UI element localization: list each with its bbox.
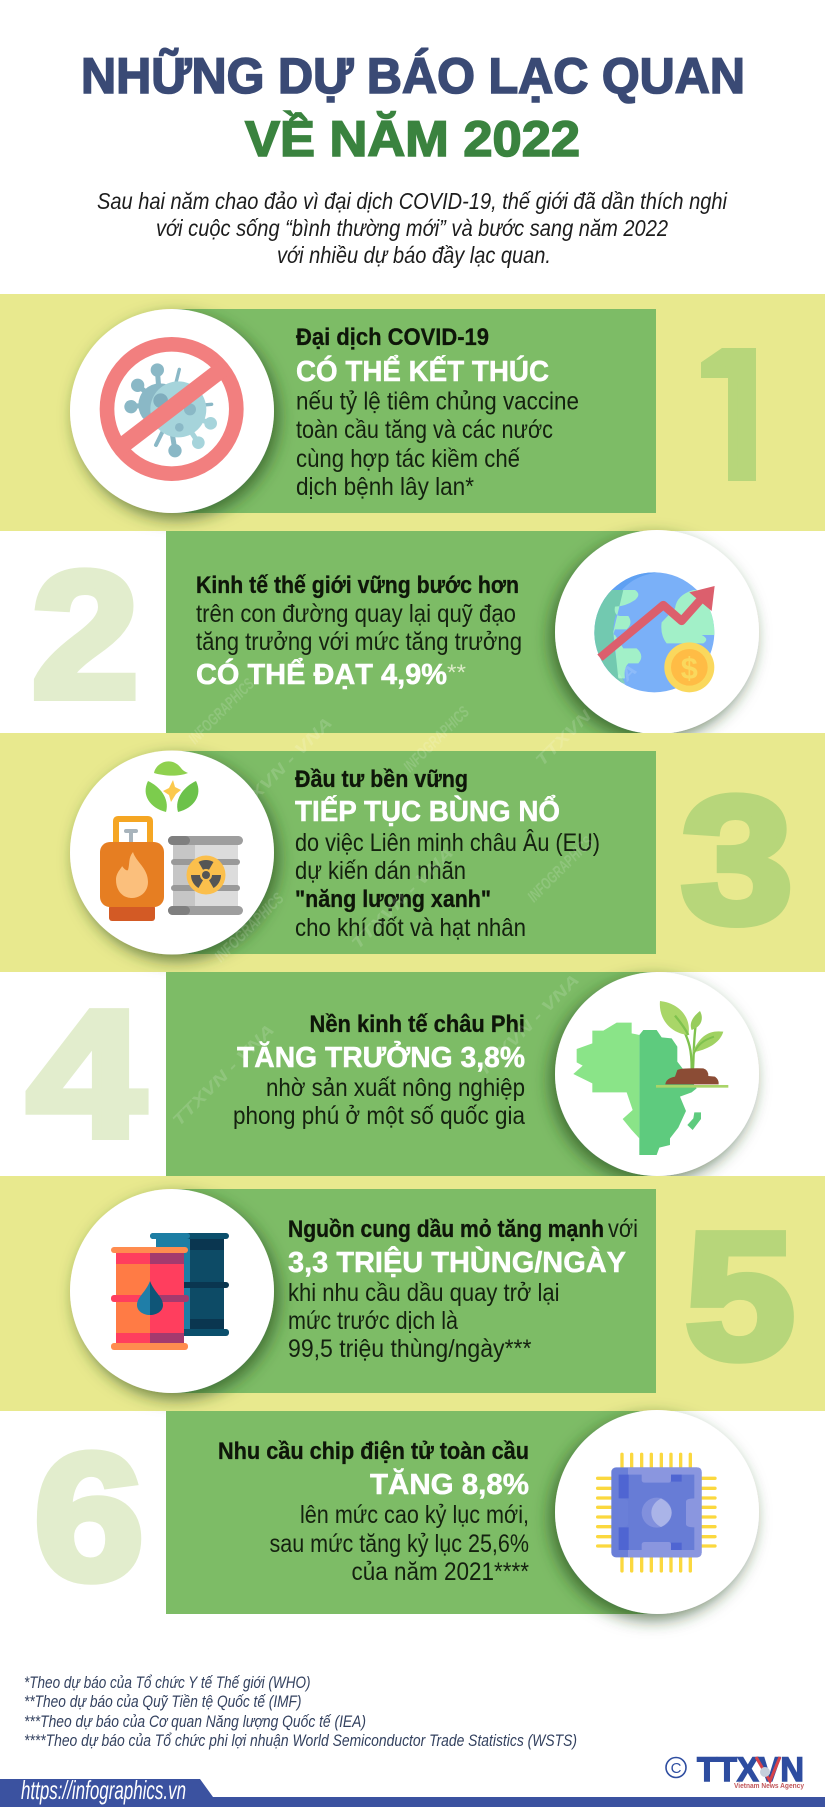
text block 4: Nền kinh tế châu Phi — [310, 1011, 525, 1038]
text block 5: mức trước dịch là — [288, 1307, 458, 1335]
text block 3: Đầu tư bền vững — [295, 766, 468, 793]
text block 2 — [196, 572, 522, 691]
intro text: với cuộc sống “bình thường mới” và bước sang năm 2022 — [156, 215, 668, 241]
watermarks: INFOGRAPHICS — [401, 704, 473, 776]
footer bar with URL: https://infographics.vn — [21, 1775, 186, 1805]
watermarks — [170, 662, 641, 1130]
icon: oil barrels — [111, 1233, 229, 1350]
title: VỀ NĂM 2022 — [245, 111, 580, 167]
logo: TTXVN: TTXVN — [697, 1751, 804, 1789]
text block 6: sau mức tăng kỷ lục 25,6% — [270, 1530, 529, 1558]
text block 2: Kinh tế thế giới vững bước hơn — [196, 572, 519, 599]
title — [81, 47, 745, 167]
icon: nuclear barrel — [168, 836, 243, 915]
icon circle 5 — [70, 1189, 274, 1393]
number 6: 6 — [34, 1417, 144, 1618]
text block 5: với — [608, 1215, 638, 1243]
icon: Africa map with plant — [573, 1001, 728, 1155]
text block 2: CÓ THỂ ĐẠT 4,9% — [196, 657, 447, 691]
title: NHỮNG DỰ BÁO LẠC QUAN — [81, 47, 745, 104]
icon circle 6 — [555, 1410, 759, 1614]
watermarks: INFOGRAPHICS — [212, 890, 288, 966]
watermarks: TTXVN - VNA — [170, 1022, 278, 1130]
text block 6: Nhu cầu chip điện tử toàn cầu — [218, 1438, 529, 1465]
panel: forecast 6 — [34, 1410, 759, 1618]
intro text: với nhiều dự báo đầy lạc quan. — [277, 242, 551, 268]
footnotes: ***Theo dự báo của Cơ quan Năng lượng Quốc tế (IEA) — [24, 1713, 366, 1731]
watermarks: INFOGRAPHICS — [525, 834, 597, 906]
icon: gas cylinder — [100, 819, 164, 921]
text block 5: Nguồn cung dầu mỏ tăng mạnh — [288, 1216, 604, 1243]
text block 1 — [296, 324, 579, 501]
icon: globe with rising arrow and coin: $ — [681, 651, 698, 685]
watermarks: INFOGRAPHICS — [186, 676, 258, 748]
icon: green energy leaves — [146, 761, 198, 812]
watermarks: TTXVN - VNA — [228, 715, 336, 823]
text block 1: nếu tỷ lệ tiêm chủng vaccine — [296, 388, 579, 416]
text block 1: CÓ THỂ KẾT THÚC — [296, 354, 549, 388]
panel: forecast 1 — [0, 294, 825, 531]
footnotes: *Theo dự báo của Tổ chức Y tế Thế giới (WHO) — [24, 1674, 310, 1692]
footnotes: ****Theo dự báo của Tổ chức phi lợi nhuận World Semiconductor Trade Statistics (WSTS) — [24, 1732, 577, 1750]
icon: microchip — [596, 1453, 717, 1573]
text block 4: phong phú ở một số quốc gia — [233, 1102, 525, 1130]
number 1: 1 — [689, 309, 789, 521]
icon circle 4 — [555, 972, 759, 1176]
icon circle 3 — [70, 750, 274, 954]
text block 6 — [218, 1438, 529, 1586]
text block 3: dự kiến dán nhãn — [295, 857, 466, 885]
text block 4 — [233, 1011, 525, 1130]
panel: forecast 5 — [0, 1176, 825, 1411]
text block 5: 99,5 triệu thùng/ngày*** — [288, 1335, 532, 1363]
watermarks: TTXVN - VNA — [349, 845, 457, 953]
text block 6: lên mức cao kỷ lục mới, — [300, 1501, 529, 1529]
logo: TTXVN: Vietnam News Agency — [734, 1781, 805, 1790]
icon circle 2 — [555, 530, 759, 734]
number 5: 5 — [685, 1196, 795, 1397]
intro text: Sau hai năm chao đảo vì đại dịch COVID-19, thế giới đã dần thích nghi — [97, 188, 728, 214]
icon circle 1 — [70, 309, 274, 513]
text block 4: nhờ sản xuất nông nghiệp — [266, 1074, 525, 1102]
text block 5 — [288, 1215, 638, 1363]
text block 3: TIẾP TỤC BÙNG NỔ — [295, 794, 560, 828]
text block 1: Đại dịch COVID-19 — [296, 324, 489, 351]
watermarks: TTXVN - VNA — [475, 972, 583, 1080]
text block 3: do việc Liên minh châu Âu (EU) — [295, 828, 600, 857]
text block 6: của năm 2021**** — [352, 1558, 529, 1586]
footer bar with URL — [0, 1775, 825, 1807]
logo: TTXVN: C — [671, 1760, 682, 1777]
intro text — [97, 188, 728, 268]
text block 1: toàn cầu tăng và các nước — [296, 416, 553, 444]
footnotes — [24, 1674, 577, 1750]
text block 5: 3,3 TRIỆU THÙNG/NGÀY — [288, 1245, 626, 1279]
text block 6: TĂNG 8,8% — [370, 1468, 529, 1501]
text block 4: TĂNG TRƯỞNG 3,8% — [237, 1040, 525, 1074]
text block 2: tăng trưởng với mức tăng trưởng — [196, 628, 522, 656]
text block 2: trên con đường quay lại quỹ đạo — [196, 600, 516, 628]
panel: forecast 4 — [27, 972, 759, 1176]
text block 3: cho khí đốt và hạt nhân — [295, 914, 526, 942]
panel: forecast 2 — [32, 530, 759, 736]
text block 3: "năng lượng xanh" — [295, 886, 491, 913]
icon: virus with no sign — [107, 344, 236, 474]
number 4: 4 — [27, 974, 145, 1175]
text block 2: ** — [447, 660, 466, 685]
text block 1: cùng hợp tác kiềm chế — [296, 445, 520, 473]
number 3: 3 — [681, 760, 793, 961]
panel: forecast 3 — [0, 733, 825, 972]
number 2: 2 — [32, 535, 139, 736]
icon: globe with rising arrow and coin — [590, 568, 717, 692]
text block 1: dịch bệnh lây lan* — [296, 473, 474, 501]
watermarks: TTXVN - VNA — [533, 662, 641, 770]
text block 3 — [295, 766, 600, 942]
footnotes: **Theo dự báo của Quỹ Tiền tệ Quốc tế (IMF) — [24, 1693, 302, 1711]
text block 5: khi nhu cầu dầu quay trở lại — [288, 1279, 560, 1307]
